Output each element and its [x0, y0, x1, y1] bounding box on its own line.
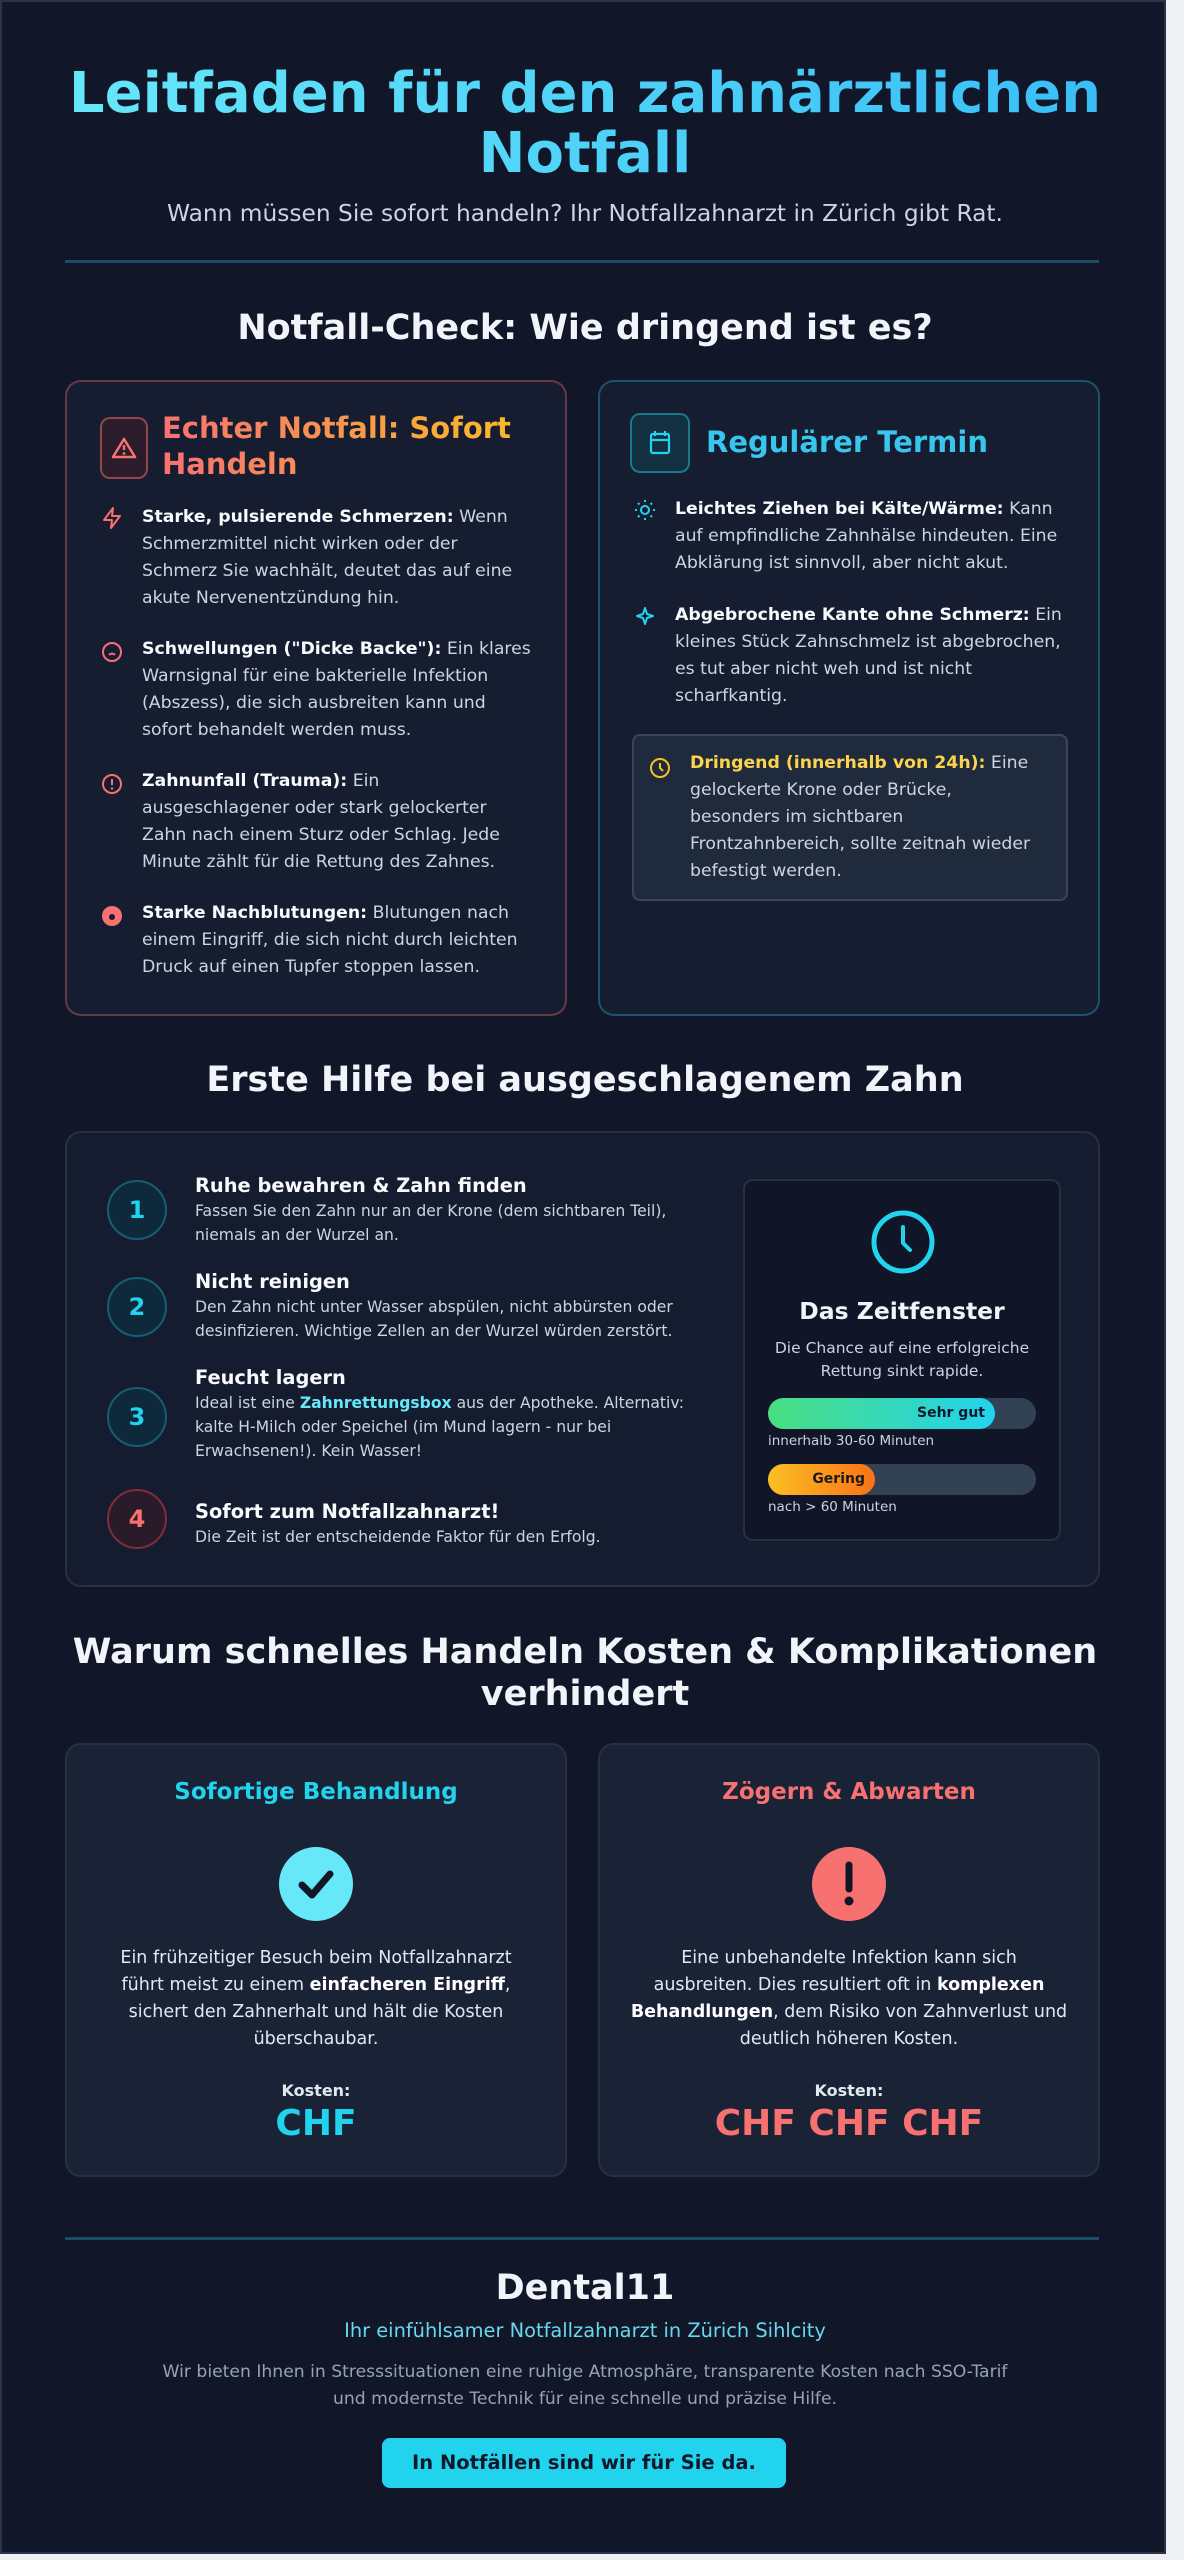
- step 1: [107, 1174, 666, 1244]
- panel: Zögern: Eine unbehandelte Infektion kann sich ausbreiten. Dies resultiert oft in komplexen Behandlungen, dem Risiko von Zahnverlust und deutlich höheren Kosten.: [631, 1948, 1067, 2049]
- step 2: 2: [129, 1293, 145, 1321]
- panel: Zögern: CHF CHF CHF: [715, 2103, 983, 2144]
- heading: Erste Hilfe: Erste Hilfe bei ausgeschlagenem Zahn: [206, 1060, 964, 1100]
- panel: Sofortige Behandlung: Sofortige Behandlung: [174, 1779, 458, 1805]
- callout: Dringend: Dringend (innerhalb von 24h): Eine gelockerte Krone oder Brücke, besonders im sichtbaren Frontzahnbereich, sollte zeitnah wieder befestigt werden.: [690, 753, 1030, 881]
- callout: Dringend: [632, 734, 1068, 901]
- panel: Zeitfenster: Die Chance auf eine erfolgreiche Rettung sinkt rapide.: [775, 1339, 1029, 1380]
- panel: echter Notfall: [65, 380, 567, 1016]
- heading: Echter Notfall: Echter Notfall: Sofort Handeln: [162, 411, 511, 481]
- panel: Zeitfenster: nach > 60 Minuten: [768, 1499, 897, 1515]
- panel: Zeitfenster: [743, 1179, 1061, 1541]
- step 3: Feucht lagern: [195, 1366, 346, 1389]
- heading: Notfall-Check: Notfall-Check: Wie dringend ist es?: [237, 308, 933, 348]
- icon: check: [279, 1847, 353, 1921]
- panel: Zeitfenster: Das Zeitfenster: [799, 1297, 1005, 1325]
- icon: clock: [872, 1210, 934, 1274]
- item: Ziehen: Leichtes Ziehen bei Kälte/Wärme: Kann auf empfindliche Zahnhälse hindeuten. Eine Abklärung ist sinnvoll, aber nicht akut.: [675, 499, 1057, 573]
- step 2: [107, 1270, 673, 1340]
- step 1: 1: [129, 1196, 145, 1224]
- step 3: Ideal ist eine Zahnrettungsbox aus der Apotheke. Alternativ: kalte H-Milch oder Speichel (im Mund lagern - nur bei Erwachsenen!). Kein Wasser!: [195, 1394, 684, 1460]
- panel: Sofortige Behandlung: Ein frühzeitiger Besuch beim Notfallzahnarzt führt meist zu einem einfacheren Eingriff, sichert den Zahnerhalt und hält die Kosten überschaubar.: [120, 1948, 512, 2049]
- step 2: Den Zahn nicht unter Wasser abspülen, nicht abbürsten oder desinfizieren. Wichtige Zellen an der Wurzel würden zerstört.: [195, 1298, 673, 1340]
- subtitle: Wann müssen Sie sofort handeln? Ihr Notfallzahnarzt in Zürich gibt Rat.: [167, 200, 1003, 227]
- footer: brand: Dental11: [496, 2268, 674, 2308]
- step 4: Sofort zum Notfallzahnarzt!: [195, 1500, 499, 1523]
- icon: calendar: [630, 413, 690, 473]
- step 3: [107, 1366, 684, 1460]
- panel: Zögern: Zögern & Abwarten: [722, 1779, 976, 1805]
- panel: Zeitfenster: innerhalb 30-60 Minuten: [768, 1433, 934, 1449]
- bar: gering: Gering: [812, 1471, 865, 1487]
- step 3: 3: [129, 1403, 145, 1431]
- title: Leitfaden für den zahnärztlichen Notfall: [69, 61, 1101, 186]
- bar: sehr gut: [768, 1398, 1036, 1429]
- footer: description: Wir bieten Ihnen in Stresssituationen eine ruhige Atmosphäre, transparente Kosten nach SSO-Tarif und modernste Technik für eine schnelle und präzise Hilfe.: [162, 2362, 1008, 2409]
- item: Nachblutungen: Starke Nachblutungen: Blutungen nach einem Eingriff, die sich nicht durch leichten Druck auf einen Tupfer stoppen lassen.: [142, 903, 518, 977]
- panel: Sofortige Behandlung: Kosten:: [282, 2081, 350, 2100]
- button: [382, 2438, 786, 2488]
- item: Schmerzen: Starke, pulsierende Schmerzen: Wenn Schmerzmittel nicht wirken oder der Schmerz Sie wachhält, deutet das auf eine akute Nervenentzündung hin.: [142, 507, 512, 608]
- panel: Sofortige Behandlung: [65, 1743, 567, 2177]
- step 4: 4: [129, 1505, 145, 1533]
- icon: warning: [100, 417, 148, 479]
- panel: Erste Hilfe: [65, 1131, 1100, 1587]
- bar: gering: [768, 1464, 1036, 1495]
- footer: tagline: Ihr einfühlsamer Notfallzahnarzt in Zürich Sihlcity: [344, 2319, 826, 2342]
- step 1: Ruhe bewahren & Zahn finden: [195, 1174, 527, 1197]
- step 2: Nicht reinigen: [195, 1270, 350, 1293]
- heading: Warum: Warum schnelles Handeln Kosten & Komplikationen verhindert: [73, 1632, 1097, 1714]
- heading: Regulärer Termin: Regulärer Termin: [706, 425, 988, 459]
- bar: sehr gut: Sehr gut: [917, 1405, 985, 1421]
- item: Zahnunfall: Zahnunfall (Trauma): Ein ausgeschlagener oder stark gelockerter Zahn nach einem Sturz oder Schlag. Jede Minute zählt für die Rettung des Zahnes.: [142, 771, 500, 872]
- step 4: Die Zeit ist der entscheidende Faktor für den Erfolg.: [195, 1528, 601, 1546]
- item: Schwellungen: Schwellungen ("Dicke Backe"): Ein klares Warnsignal für eine bakterielle Infektion (Abszess), die sich ausbreiten kann und sofort behandelt werden muss.: [142, 639, 531, 740]
- item: Kante: Abgebrochene Kante ohne Schmerz: Ein kleines Stück Zahnschmelz ist abgebrochen, es tut aber nicht weh und ist nicht scharfkantig.: [675, 605, 1062, 706]
- icon: alert: [812, 1847, 886, 1921]
- step 1: Fassen Sie den Zahn nur an der Krone (dem sichtbaren Teil), niemals an der Wurzel an.: [195, 1202, 666, 1244]
- panel: Zögern: [598, 1743, 1100, 2177]
- step 4: [107, 1489, 601, 1549]
- panel: Zögern: Kosten:: [815, 2081, 883, 2100]
- button: In Notfällen sind wir für Sie da.: [412, 2451, 756, 2474]
- panel: Sofortige Behandlung: CHF: [275, 2103, 357, 2144]
- panel: regulärer Termin: [598, 380, 1100, 1016]
